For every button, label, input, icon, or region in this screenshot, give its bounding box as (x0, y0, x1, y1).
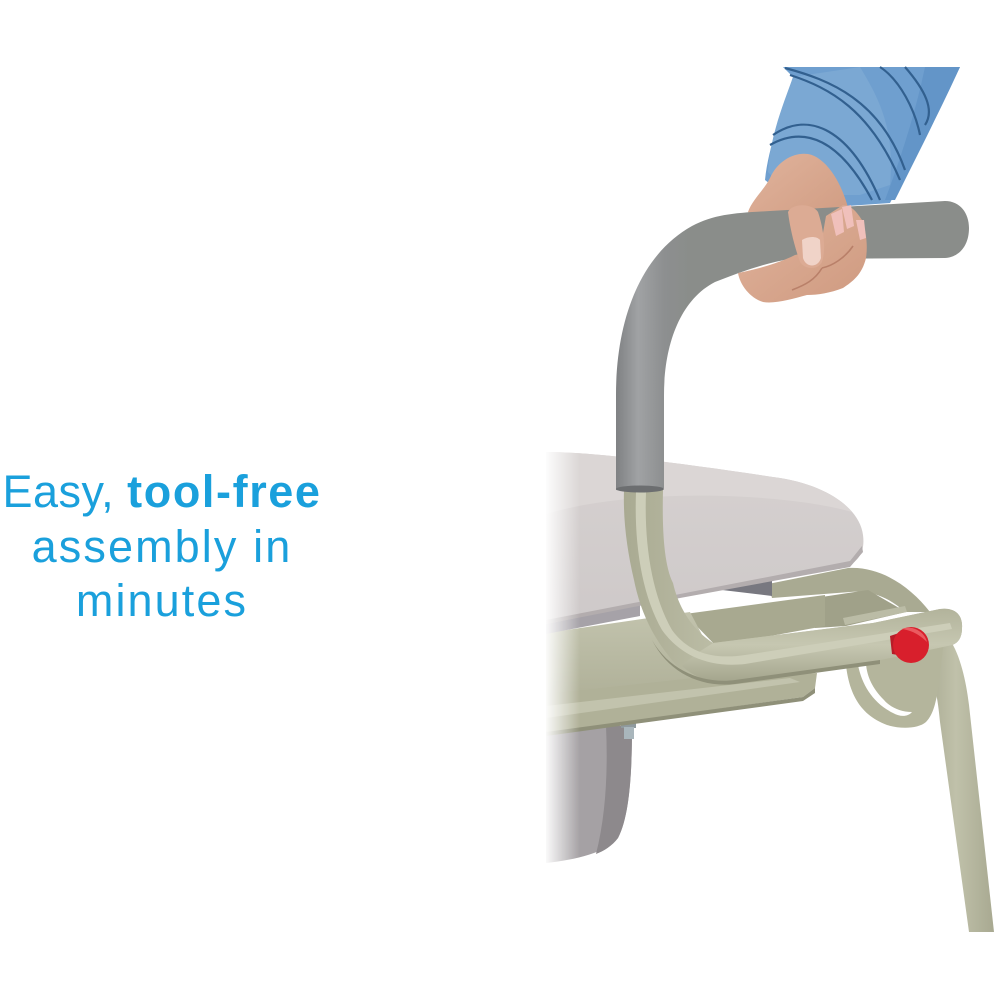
denim sleeve (765, 67, 960, 206)
back of hand behind grip (748, 154, 850, 232)
headline text: assembly in (32, 520, 292, 572)
grab arm padded grip (616, 201, 969, 492)
seat rail trough (685, 595, 825, 646)
bolt (621, 722, 636, 739)
rear arch frame (768, 568, 930, 628)
headline text (2, 466, 322, 626)
red knob (890, 627, 929, 663)
seat cushion (546, 452, 863, 624)
headline text: minutes (76, 575, 248, 626)
rear leg (925, 640, 994, 932)
upper seat rail (546, 612, 728, 695)
lower seat rail (546, 673, 817, 736)
slotted round plate (845, 640, 944, 728)
horizontal tube and lower arm (624, 490, 962, 685)
bucket (546, 726, 632, 863)
white fade on left edge of photo (544, 440, 580, 870)
fingers and thumb (738, 205, 867, 302)
headline text: Easy, tool-free (2, 466, 322, 517)
seat underside shadow (546, 578, 772, 634)
